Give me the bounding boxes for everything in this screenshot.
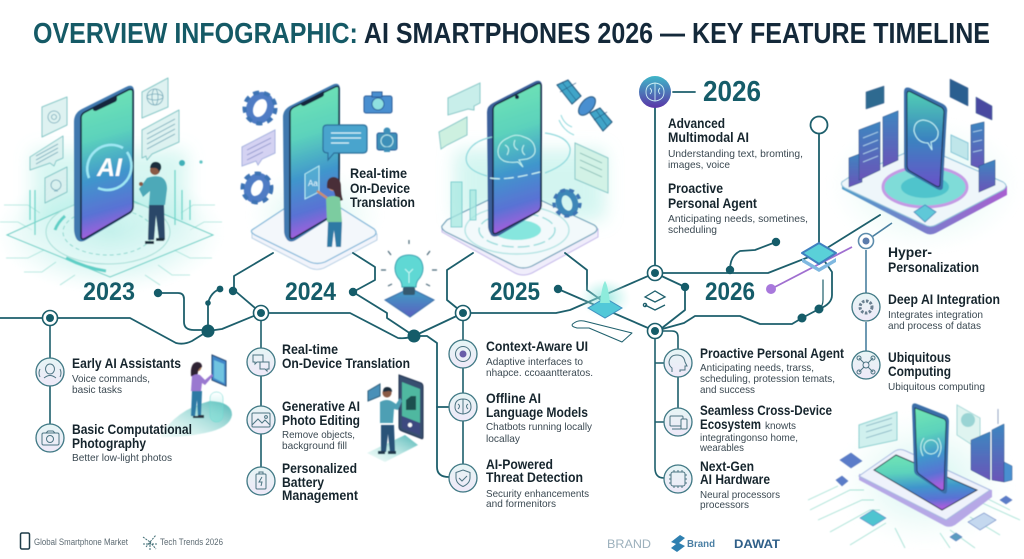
icon: network xyxy=(852,351,880,379)
text: Next-Gen AI Hardware: Neural processors xyxy=(700,489,780,501)
text: Personalized Battery Management xyxy=(282,460,358,503)
text: AI-Powered Threat Detection xyxy=(486,456,589,510)
text: Generative AI Photo Editing: background fill xyxy=(282,440,347,452)
panel: 2026 heading with brain badge: 2026 xyxy=(703,76,761,108)
text: Context-Aware UI: nhapce. ccoaantteratos. xyxy=(486,367,593,379)
illustration: 2023 phone on platform xyxy=(0,78,225,294)
year labels: 2023 xyxy=(83,278,135,306)
lying phone xyxy=(874,455,977,510)
text: Basic Computational Photography: Better low-light photos xyxy=(72,452,172,464)
text block: Proactive Personal Agent: Proactive xyxy=(668,180,723,196)
icon: gears xyxy=(852,293,880,321)
translate card: Aa xyxy=(308,179,318,188)
caption: Real-time On-Device Translation (on phone) xyxy=(350,165,415,210)
icon: devices xyxy=(664,408,692,436)
phone body xyxy=(283,84,340,242)
text: Hyper-Personalization: Personalization xyxy=(888,259,979,275)
text: Generative AI Photo Editing: Photo Editing xyxy=(282,412,360,428)
illustration: 2023 phone on platform: AI xyxy=(96,154,123,182)
year labels: 2026 xyxy=(705,278,755,306)
year labels: 2024 xyxy=(285,278,336,306)
translate card xyxy=(305,166,319,199)
text block: Advanced Multimodal AI: Advanced xyxy=(668,115,725,131)
text: Ubiquitous Computing: Ubiquitous xyxy=(888,349,951,365)
text: Deep AI Integration: and process of datas xyxy=(888,320,981,332)
footer: brand logos xyxy=(607,535,781,552)
gear xyxy=(554,190,580,216)
text: AI-Powered Threat Detection: Security enhancements xyxy=(486,488,589,500)
footer: brand logos: DAWAT xyxy=(734,537,781,551)
text: Generative AI Photo Editing xyxy=(282,398,360,452)
text: Ubiquitous Computing: Ubiquitous computing xyxy=(888,381,985,393)
standing phone xyxy=(912,403,949,494)
footer: tech trends xyxy=(143,535,223,551)
text: Generative AI Photo Editing: Generative AI xyxy=(282,398,360,414)
panel: 2024 features xyxy=(247,341,423,503)
orbit rings xyxy=(466,133,570,179)
phone body xyxy=(74,86,134,242)
text: Early AI Assistants xyxy=(72,355,181,396)
caption: Real-time On-Device Translation (on phone): Translation xyxy=(350,194,415,210)
text: Proactive Personal Agent: Anticipating needs, trarss, xyxy=(700,362,814,374)
puzzle icon xyxy=(377,128,397,152)
year labels: 2025 xyxy=(490,278,540,306)
phone body xyxy=(487,81,542,237)
text: Generative AI Photo Editing: Remove objects, xyxy=(282,429,355,441)
text: Ubiquitous Computing: Computing xyxy=(888,363,951,379)
lilac chat bubble xyxy=(242,130,275,166)
text block: Advanced Multimodal AI: Multimodal AI xyxy=(668,129,749,145)
icon: head with brain xyxy=(664,349,692,377)
footer: tech trends: Tech Trends 2026 xyxy=(160,537,223,547)
text block: Proactive Personal Agent: Personal Agent xyxy=(668,195,757,211)
illustration: 2026 phone and data city xyxy=(825,79,1024,255)
text: Hyper-Personalization: Hyper- xyxy=(888,244,932,260)
text: Early AI Assistants: basic tasks xyxy=(72,384,122,396)
icon: processor chip xyxy=(664,465,692,493)
text block: Proactive Personal Agent: Anticipating needs, sometines, xyxy=(668,213,808,225)
text: Ubiquitous Computing xyxy=(888,349,985,393)
text: Context-Aware UI: Adaptive interfaces to xyxy=(486,356,583,368)
text block: Advanced Multimodal AI: images, voice xyxy=(668,159,730,171)
text: Offline AI Language Models: Chatbots running locally xyxy=(486,421,593,433)
panel: 2026 heading with brain badge xyxy=(639,76,761,108)
icon: shield xyxy=(449,464,477,492)
speech bubble xyxy=(323,125,367,160)
text: Seamless Cross-Device Ecosystem: wearables xyxy=(699,442,744,454)
icon: stacked layers xyxy=(643,291,665,310)
footer: brand logos: BRAND xyxy=(607,537,651,551)
small chips xyxy=(836,453,1012,541)
text: Offline AI Language Models: Language Models xyxy=(486,404,588,420)
text: Seamless Cross-Device Ecosystem: Ecosystem xyxy=(700,416,761,432)
illustration: lightbulb on chip xyxy=(381,240,437,317)
text: Next-Gen AI Hardware xyxy=(700,458,780,511)
data towers xyxy=(849,111,995,192)
icon: image xyxy=(247,406,275,434)
text: AI-Powered Threat Detection: Threat Detection xyxy=(486,469,583,485)
satellite xyxy=(557,80,612,135)
floating tiles xyxy=(866,79,992,120)
text: Basic Computational Photography: Photography xyxy=(72,435,146,451)
towers xyxy=(971,409,1012,482)
text: Next-Gen AI Hardware: processors xyxy=(700,499,749,511)
illustration: woman with tablet xyxy=(160,355,232,437)
panel: 2025 features xyxy=(449,338,593,510)
icon: brain xyxy=(449,393,477,421)
text block: Advanced Multimodal AI: Understanding text, bromting, xyxy=(668,148,803,160)
panel: future features xyxy=(852,244,1000,393)
illustration: 2025 phone on platform xyxy=(439,80,612,275)
floating panels xyxy=(859,412,897,448)
icon: chat translation xyxy=(247,348,275,376)
text: Basic Computational Photography xyxy=(72,421,192,464)
footer: market source: Global Smartphone Market xyxy=(34,537,128,547)
icon: camera xyxy=(36,424,64,452)
brain on screen xyxy=(498,135,535,167)
floating panels xyxy=(439,83,608,193)
icon: central chip hub xyxy=(802,243,836,272)
gears xyxy=(242,92,276,203)
chat and icon tiles xyxy=(30,78,179,203)
caption: Real-time On-Device Translation (on phone): On-Device xyxy=(350,180,410,196)
text: AI-Powered Threat Detection: AI-Powered xyxy=(486,456,553,472)
person xyxy=(317,177,343,247)
camera icon xyxy=(364,92,392,113)
text: Real-time On-Device Translation: On-Device Translation xyxy=(282,355,410,371)
text: Offline AI Language Models xyxy=(486,390,593,445)
text: Context-Aware UI xyxy=(486,338,593,379)
timeline nodes xyxy=(42,116,874,342)
text: Deep AI Integration xyxy=(888,291,1000,332)
text: Real-time On-Device Translation xyxy=(282,341,410,371)
phone body xyxy=(904,88,947,190)
text: AI-Powered Threat Detection: and formenitors xyxy=(486,498,556,510)
text: Personalized Battery Management: Battery xyxy=(282,474,324,490)
text: Basic Computational Photography: Basic Computational xyxy=(72,421,192,437)
panel: 2023 features xyxy=(36,355,232,464)
text: Next-Gen AI Hardware: AI Hardware xyxy=(700,471,770,487)
text: Real-time On-Device Translation: Real-time xyxy=(282,341,338,357)
illustration: 2024 phone on platform xyxy=(242,84,397,270)
text: Early AI Assistants: Voice commands, xyxy=(72,373,150,385)
text block: Advanced Multimodal AI xyxy=(668,115,803,171)
caption: Real-time On-Device Translation (on phone): Real-time xyxy=(350,165,407,181)
text block: Proactive Personal Agent: scheduling xyxy=(668,224,717,236)
icon: battery xyxy=(247,467,275,495)
timeline circuit lines xyxy=(0,92,892,478)
text: Deep AI Integration: Integrates integration xyxy=(888,309,983,321)
text: Offline AI Language Models: locallay xyxy=(486,433,521,445)
text: Seamless Cross-Device Ecosystem: knowts xyxy=(765,420,796,432)
text: Seamless Cross-Device Ecosystem: integratingonso home, xyxy=(700,432,798,444)
text: Personalized Battery Management: Personalized xyxy=(282,460,357,476)
illustration: ubiquitous computing phones and circuit board xyxy=(808,403,1020,550)
text: Early AI Assistants: Early AI Assistants xyxy=(72,355,181,371)
year labels xyxy=(83,278,755,306)
text: Hyper-Personalization xyxy=(888,244,979,275)
illustration: man editing photo on large phone xyxy=(367,375,423,462)
icon: rocket chip xyxy=(579,278,631,318)
text: Context-Aware UI: Context-Aware UI xyxy=(486,338,588,354)
icon: voice assistant xyxy=(36,358,64,386)
text block: Proactive Personal Agent xyxy=(668,180,808,236)
text: Proactive Personal Agent: scheduling, protession temats, xyxy=(700,373,835,385)
text: Proactive Personal Agent xyxy=(700,345,844,396)
text: Proactive Personal Agent: and success xyxy=(700,384,755,396)
text: Offline AI Language Models: Offline AI xyxy=(486,390,541,406)
text: Next-Gen AI Hardware: Next-Gen xyxy=(700,458,754,474)
text: Proactive Personal Agent: Proactive Personal Agent xyxy=(700,345,844,361)
text: Personalized Battery Management: Management xyxy=(282,487,358,503)
footer: brand logos: Brand xyxy=(687,538,715,550)
icon: target sync xyxy=(449,340,477,368)
person xyxy=(139,162,167,244)
text: Deep AI Integration: Deep AI Integration xyxy=(888,291,1000,307)
text: Seamless Cross-Device Ecosystem: Seamless Cross-Device xyxy=(700,402,832,418)
footer: market source xyxy=(20,533,128,549)
text: Seamless Cross-Device Ecosystem xyxy=(699,402,832,454)
panel: 2026 features xyxy=(664,345,844,511)
